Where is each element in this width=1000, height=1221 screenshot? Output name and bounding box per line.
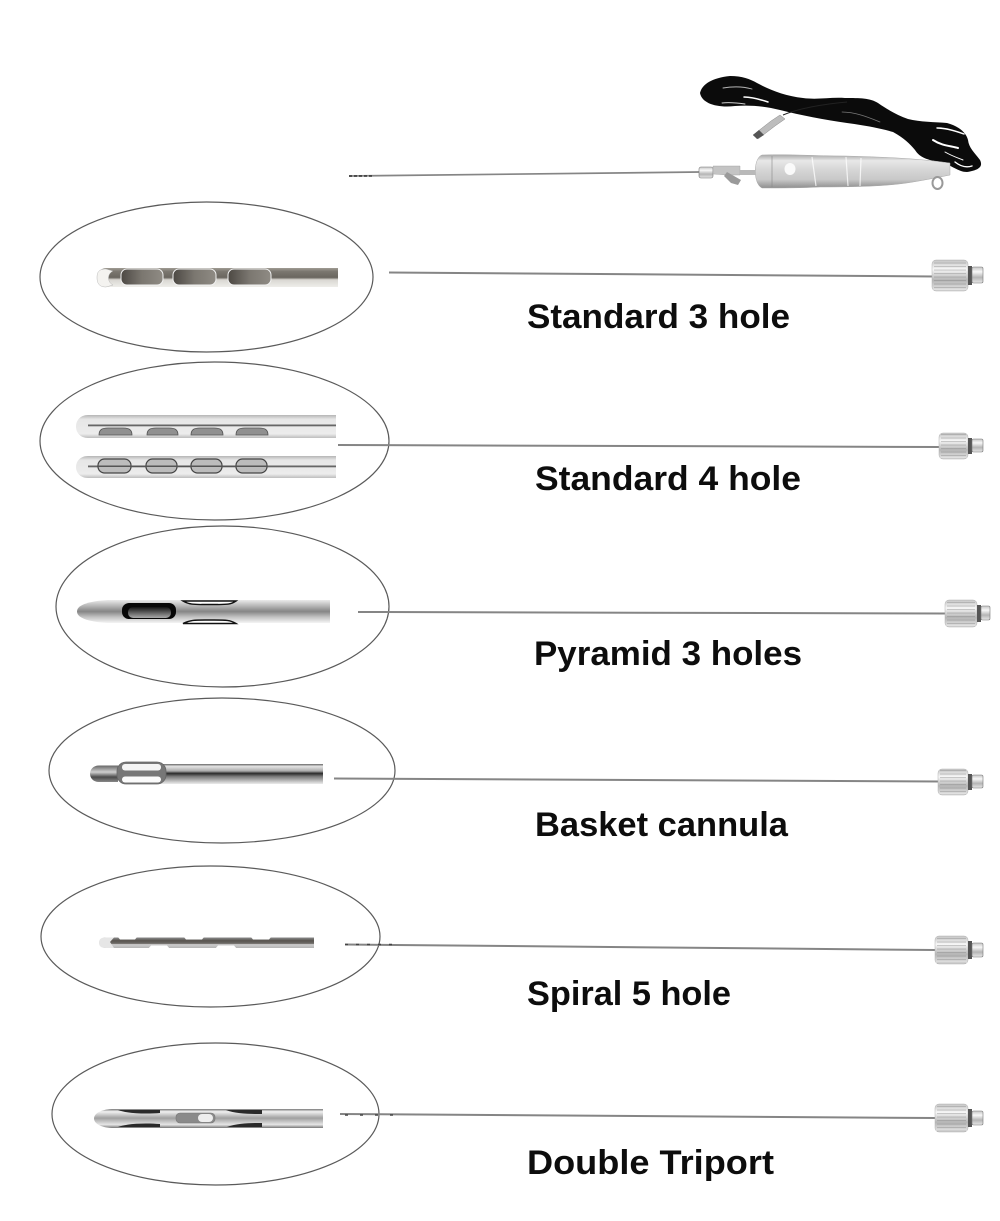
full cannula — [345, 944, 935, 950]
top view tube — [76, 456, 336, 478]
cannula tip detail — [90, 762, 323, 784]
small connector — [753, 102, 847, 139]
row: Pyramid 3 holes — [56, 526, 990, 687]
cannula tip detail — [99, 936, 314, 949]
full cannula — [334, 778, 940, 782]
label: Basket cannula — [535, 806, 789, 844]
row: Basket cannula — [49, 698, 983, 844]
full cannula — [358, 612, 945, 614]
detail oval — [52, 1043, 379, 1185]
handle — [755, 155, 950, 188]
cable bundle — [700, 76, 981, 172]
handpiece with cable — [349, 76, 981, 189]
row: Double Triport — [52, 1043, 983, 1185]
ring — [932, 177, 942, 189]
label: Double Triport — [527, 1144, 774, 1182]
full cannula — [340, 1114, 935, 1118]
cannula tip detail — [76, 415, 336, 478]
valve — [699, 166, 758, 185]
cannula tip detail — [94, 1109, 323, 1128]
detail oval — [49, 698, 395, 843]
cable highlights — [722, 87, 972, 167]
row: Standard 4 hole — [40, 362, 983, 520]
detail oval — [41, 866, 380, 1007]
label: Standard 3 hole — [527, 298, 790, 336]
cannula tip detail — [97, 268, 338, 287]
hub — [945, 600, 990, 627]
hub — [939, 433, 983, 459]
label: Spiral 5 hole — [527, 975, 731, 1013]
detail oval — [56, 526, 389, 687]
hub — [932, 260, 983, 291]
full cannula — [389, 272, 935, 276]
needle — [349, 172, 700, 176]
row: Spiral 5 hole — [41, 866, 983, 1013]
detail oval — [40, 362, 389, 520]
hub — [938, 769, 983, 795]
label: Pyramid 3 holes — [534, 635, 802, 673]
hub — [935, 936, 983, 964]
detail oval — [40, 202, 373, 352]
side view tube — [76, 415, 336, 438]
row: Standard 3 hole — [40, 202, 983, 352]
label: Standard 4 hole — [535, 460, 801, 498]
hub — [935, 1104, 983, 1132]
cannula tip detail — [77, 600, 330, 624]
full cannula — [338, 445, 940, 447]
